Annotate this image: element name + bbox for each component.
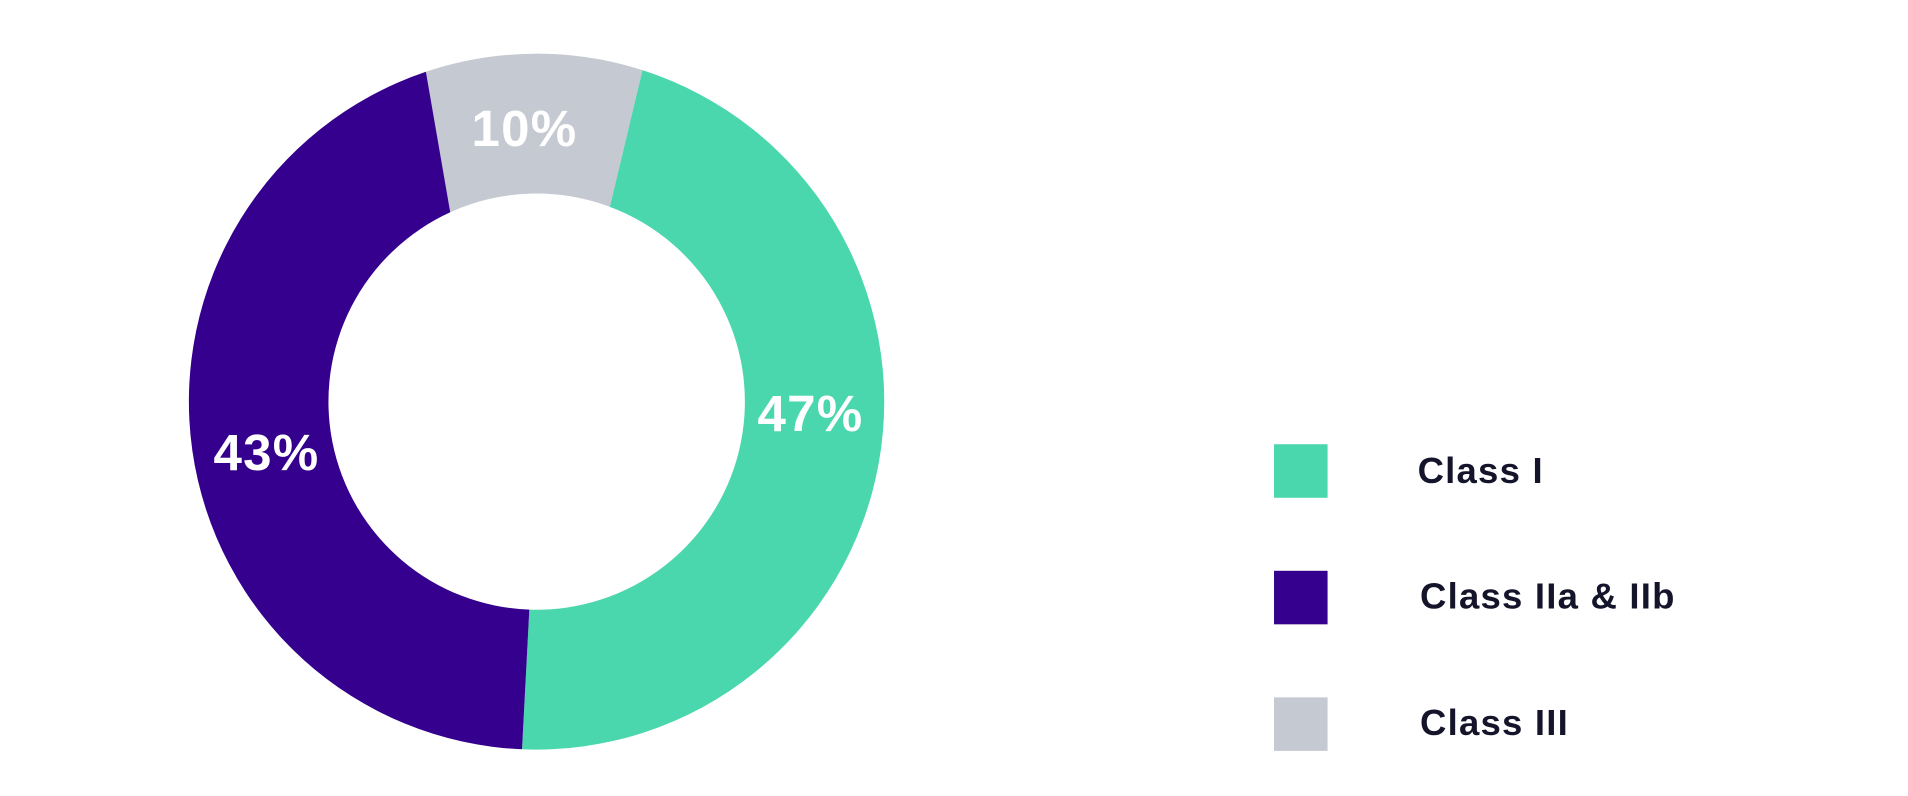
legend item: Class III xyxy=(1274,697,1569,751)
legend item: Class IIa & IIb: Class IIa & IIb xyxy=(1420,576,1676,617)
legend item: Class III: Class III xyxy=(1420,702,1569,743)
label 47%: 47% xyxy=(757,385,863,442)
label 10%: 10% xyxy=(471,100,577,157)
label 43%: 43% xyxy=(214,424,319,481)
legend item: Class IIa & IIb xyxy=(1274,571,1676,624)
legend item: Class I: Class I xyxy=(1418,450,1544,491)
legend xyxy=(1274,444,1676,751)
segment: Class I 47% xyxy=(522,70,884,750)
donut chart xyxy=(189,54,884,750)
segment: Class III 10% xyxy=(426,54,642,212)
legend item: Class I xyxy=(1274,444,1544,498)
segment: Class IIa & IIb 43% xyxy=(189,72,529,749)
